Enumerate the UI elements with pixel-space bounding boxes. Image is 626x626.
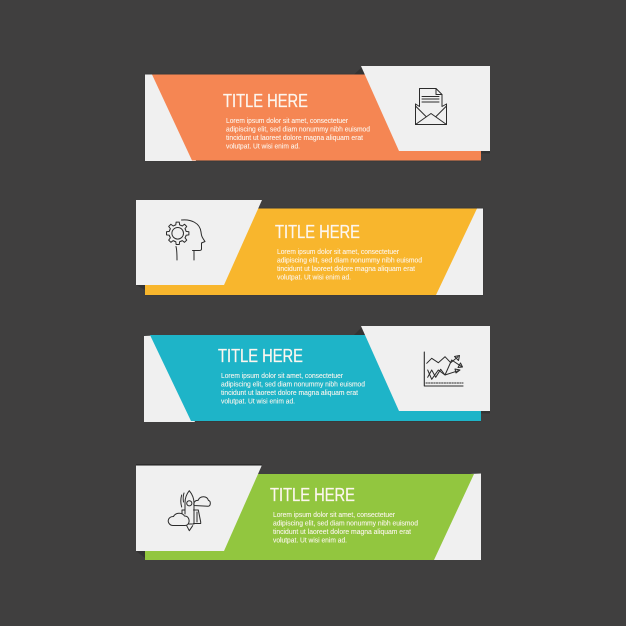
left white wedge (145, 74, 196, 161)
body text: adipiscing elit, sed diam nonummy nibh euismod (273, 518, 418, 527)
panel: yellow banner (136, 200, 484, 296)
body text: Lorem ipsum dolor sit amet, consectetuer (277, 247, 399, 256)
panel: orange banner (144, 66, 490, 162)
body text: Lorem ipsum dolor sit amet, consectetuer (226, 116, 348, 125)
banner base with left white corner (144, 335, 481, 422)
icon tab (136, 465, 262, 551)
body text (277, 247, 422, 282)
body text: adipiscing elit, sed diam nonummy nibh euismod (221, 379, 365, 388)
panel shadow (136, 551, 145, 558)
panel shadow (136, 285, 145, 290)
body text: tincidunt ut laoreet dolore magna aliquam erat (226, 133, 364, 142)
orange band (152, 74, 481, 160)
body text: adipiscing elit, sed diam nonummy nibh euismod (226, 124, 370, 133)
panel: green banner (136, 465, 481, 560)
icon: line chart with arrows (424, 352, 463, 386)
panel shadow (354, 328, 365, 335)
icon tab (361, 66, 490, 151)
body text (221, 371, 365, 406)
body text: adipiscing elit, sed diam nonummy nibh euismod (277, 255, 422, 264)
panel shadow (354, 68, 365, 74)
right white wedge (430, 474, 481, 560)
heading: TITLE HERE (223, 91, 308, 111)
icon tab (361, 326, 490, 411)
body text: Lorem ipsum dolor sit amet, consectetuer (221, 371, 343, 380)
teal band (150, 335, 481, 421)
body text: volutpat. Ut wisi enim ad. (273, 536, 347, 544)
banner base with left white corner (144, 74, 481, 162)
body text: volutpat. Ut wisi enim ad. (226, 142, 300, 150)
heading: TITLE HERE (218, 346, 303, 366)
heading: TITLE HERE (270, 485, 355, 505)
icon: head with gear (167, 220, 205, 260)
body text: tincidunt ut laoreet dolore magna aliquam erat (221, 388, 359, 397)
left white wedge (144, 336, 195, 422)
right white wedge (432, 208, 483, 295)
body text (273, 510, 418, 544)
body text (226, 116, 370, 150)
panel: teal banner (144, 326, 490, 422)
icon: envelope with letter (416, 88, 446, 124)
body text: volutpat. Ut wisi enim ad. (277, 272, 351, 282)
body text: tincidunt ut laoreet dolore magna aliquam erat (277, 264, 416, 273)
icon tab (136, 200, 262, 285)
heading: TITLE HERE (275, 222, 360, 242)
icon: rocket and clouds (168, 491, 210, 531)
yellow band (145, 208, 477, 295)
body text: Lorem ipsum dolor sit amet, consectetuer (273, 510, 395, 519)
banner base with right white corner (145, 208, 484, 296)
green band (145, 474, 474, 560)
body text: volutpat. Ut wisi enim ad. (221, 396, 295, 406)
body text: tincidunt ut laoreet dolore magna aliquam erat (273, 527, 412, 536)
